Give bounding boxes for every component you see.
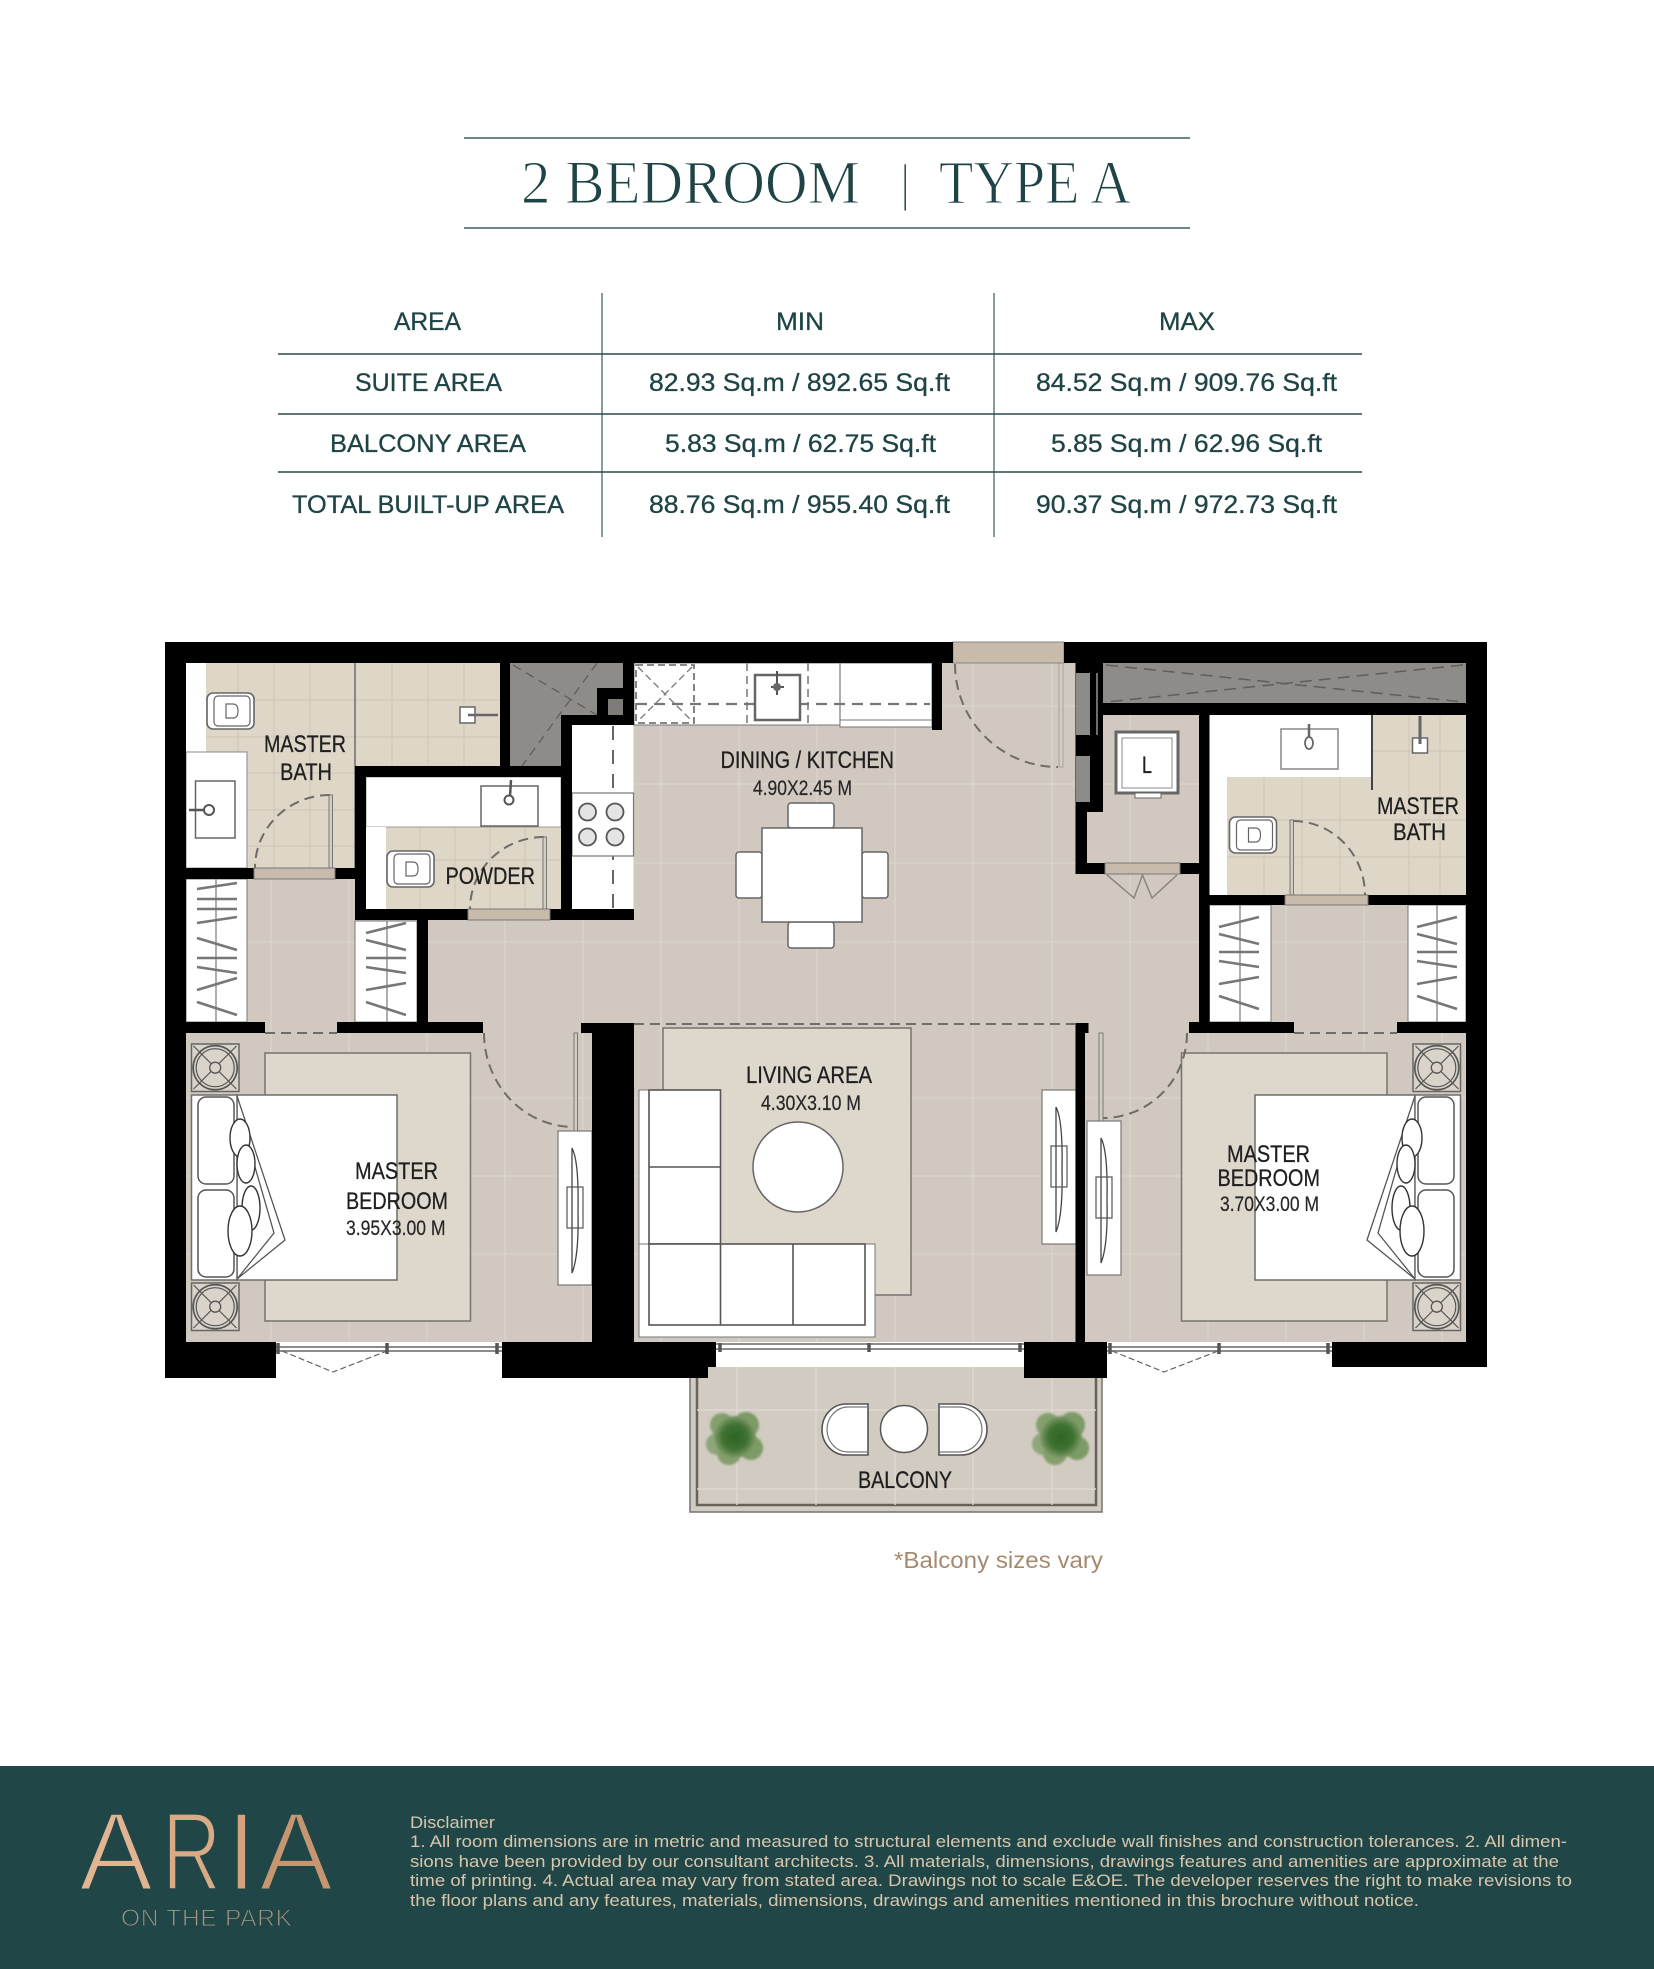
walls bbox=[165, 642, 1487, 1378]
floors bbox=[186, 663, 1466, 1342]
living area: LIVING AREA bbox=[746, 1062, 872, 1089]
area table: 84.52 Sq.m / 909.76 Sq.ft bbox=[1036, 369, 1337, 397]
area table: 5.85 Sq.m / 62.96 Sq.ft bbox=[1051, 430, 1322, 458]
kitchen counters bbox=[572, 663, 932, 909]
disclaimer: 1. All room dimensions are in metric and measured to structural elements and exclude wall finishes and construction tolerances. 2. All dimen- bbox=[410, 1833, 1567, 1851]
logo subtitle: ON THE PARK bbox=[121, 1905, 293, 1932]
ARIA logo: R bbox=[162, 1790, 221, 1914]
right master bedroom: BEDROOM bbox=[1218, 1165, 1320, 1192]
area table: BALCONY AREA bbox=[330, 430, 526, 458]
area table: AREA bbox=[394, 308, 461, 336]
right master bath: BATH bbox=[1393, 819, 1446, 846]
disclaimer: the floor plans and any features, materials, dimensions, drawings and amenities mentioned in this brochure without notice. bbox=[410, 1892, 1419, 1910]
right master bedroom: MASTER bbox=[1227, 1141, 1310, 1168]
title block: | bbox=[900, 155, 910, 212]
title block bbox=[464, 138, 1190, 228]
left master bath: MASTER bbox=[264, 731, 346, 758]
disclaimer: time of printing. 4. Actual area may vary from stated area. Drawings not to scale E&OE. The developer reserves the right to make revisions to bbox=[410, 1872, 1572, 1890]
title block: 2 BEDROOM bbox=[521, 150, 860, 217]
balcony: BALCONY bbox=[858, 1467, 952, 1494]
area table: TOTAL BUILT-UP AREA bbox=[292, 491, 564, 519]
area table: MAX bbox=[1159, 308, 1215, 336]
ARIA logo bbox=[79, 1790, 333, 1914]
left master bedroom bbox=[192, 1033, 592, 1330]
right master bath: MASTER bbox=[1377, 793, 1459, 820]
left master bath bbox=[186, 663, 500, 868]
left master bedroom: BEDROOM bbox=[346, 1188, 448, 1215]
area table bbox=[278, 293, 1362, 537]
disclaimer: sions have been provided by our consultant architects. 3. All materials, dimensions, drawings features and amenities are approximate at the bbox=[410, 1853, 1559, 1871]
right master bedroom: 3.70X3.00 M bbox=[1220, 1193, 1319, 1216]
ARIA logo: I bbox=[226, 1790, 257, 1914]
living area bbox=[634, 1024, 1076, 1337]
area table: MIN bbox=[776, 308, 824, 336]
laundry closet bbox=[1107, 732, 1178, 898]
wall details, door sills and dashed openings bbox=[254, 673, 1397, 1033]
disclaimer bbox=[410, 1814, 1572, 1910]
dining table and chairs bbox=[720, 747, 894, 948]
main door swing bbox=[953, 642, 1064, 767]
dining table and chairs: 4.90X2.45 M bbox=[753, 777, 852, 800]
service shafts bbox=[510, 663, 1466, 766]
floor plan bbox=[165, 642, 1487, 1512]
area table: 90.37 Sq.m / 972.73 Sq.ft bbox=[1036, 491, 1337, 519]
area table: SUITE AREA bbox=[355, 369, 502, 397]
balcony bbox=[690, 1342, 1102, 1512]
title block: TYPE A bbox=[939, 150, 1131, 217]
dining table and chairs: DINING / KITCHEN bbox=[720, 747, 894, 774]
ARIA logo: A bbox=[79, 1790, 153, 1914]
wardrobes bbox=[186, 879, 1466, 1022]
balcony note: *Balcony sizes vary bbox=[894, 1547, 1104, 1573]
left master bath: BATH bbox=[280, 759, 332, 786]
powder room bbox=[366, 777, 561, 909]
right master bath bbox=[1210, 715, 1466, 895]
left master bedroom: 3.95X3.00 M bbox=[346, 1217, 446, 1240]
area table: 5.83 Sq.m / 62.75 Sq.ft bbox=[665, 430, 936, 458]
windows bbox=[276, 1343, 1332, 1372]
right master bedroom bbox=[1087, 1033, 1460, 1330]
left master bedroom: MASTER bbox=[355, 1158, 438, 1185]
living area: 4.30X3.10 M bbox=[761, 1092, 861, 1115]
powder room: POWDER bbox=[446, 863, 535, 890]
ARIA logo: A bbox=[259, 1790, 333, 1914]
area table: 82.93 Sq.m / 892.65 Sq.ft bbox=[649, 369, 950, 397]
disclaimer: Disclaimer bbox=[410, 1814, 496, 1832]
laundry closet: L bbox=[1142, 752, 1152, 779]
footer band bbox=[0, 1766, 1654, 1969]
area table: 88.76 Sq.m / 955.40 Sq.ft bbox=[649, 491, 950, 519]
